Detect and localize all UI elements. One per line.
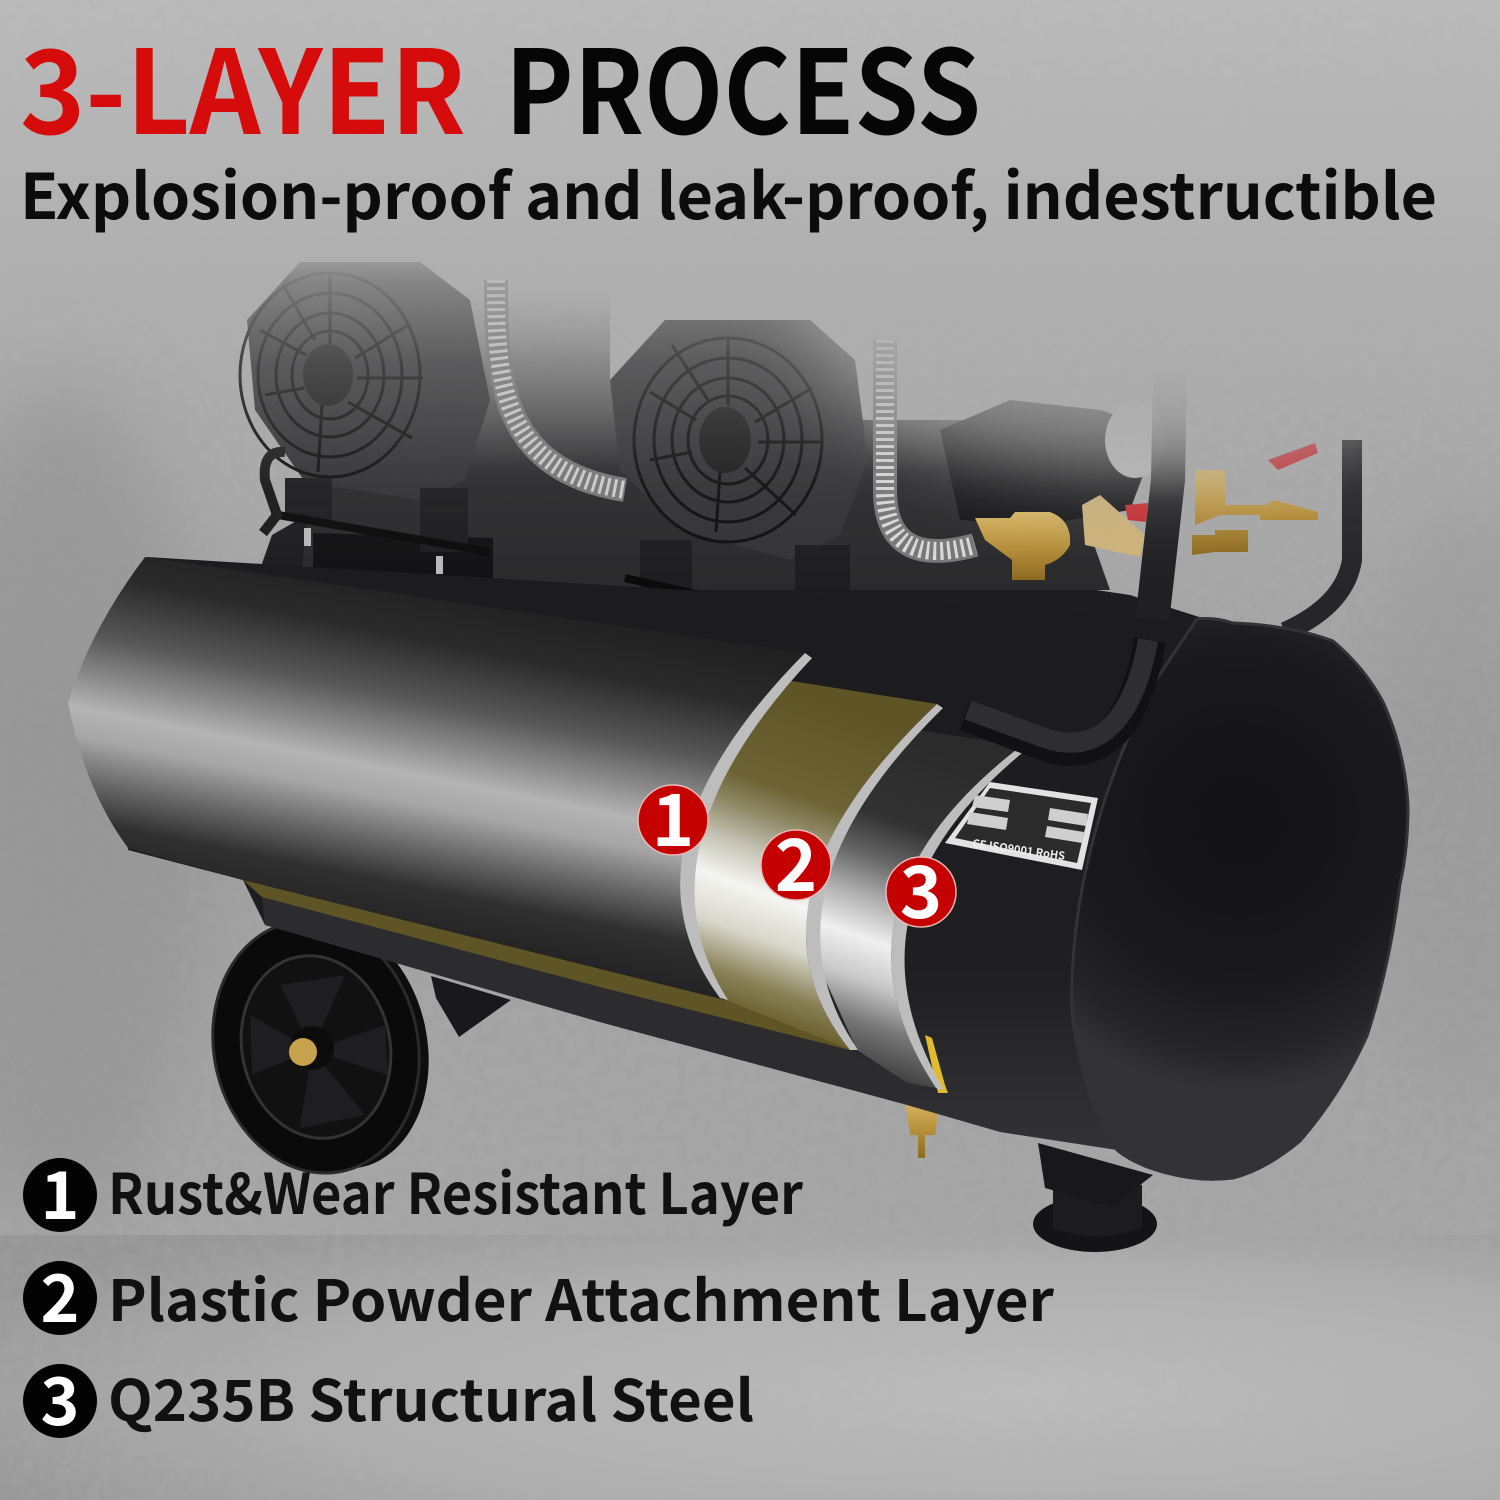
rear frame leg [431,976,511,1037]
curved handle tube along tank [965,640,1150,750]
callout badge 2 [761,807,831,912]
right handle tube [1285,440,1352,632]
nameplate: CE ISO9001 RoHS [971,835,1066,864]
callout badge 1 [638,762,708,867]
rear tank end [262,522,1200,621]
title: 3-LAYER [20,0,466,168]
yellow warning label [925,1035,948,1093]
braided hose 2 [885,340,975,551]
center brass fitting [1082,495,1145,557]
callout badge 1: 1 [652,762,694,867]
wheel hub bolt [289,1038,317,1066]
callout badge 3: 3 [900,834,942,939]
drain valve [905,1100,940,1158]
right brass fittings [1192,470,1318,555]
wheel [190,902,451,1192]
legend row 3: 3 [41,1349,79,1445]
nameplate [945,782,1098,870]
title: PROCESS [505,0,981,168]
fan 2 [610,320,868,560]
title [20,0,981,168]
bracket 2 [624,540,850,590]
steel edge stripes [680,653,1027,1090]
callout badge 2: 2 [775,807,817,912]
layer 3: structural steel panel [780,728,1021,1088]
layer 1: rust and wear panel [68,557,805,998]
legend row 1: Rust&Wear Resistant Layer [108,1150,804,1231]
callout badge 3 [886,834,956,939]
tank body [128,557,1210,1150]
bracket 1 [259,446,493,578]
tank end cap [1072,618,1408,1179]
layer 2: powder attachment panel [640,680,937,1050]
legend row 1: 1 [41,1143,79,1239]
subtitle: Explosion-proof and leak-proof, indestructible [20,147,1437,238]
red valve handles [1125,443,1318,522]
pressure gauge and valve body [940,400,1165,525]
motor bodies [300,290,1110,590]
olive underside strip [243,880,850,1050]
left brass fitting [975,512,1070,580]
upright handle tube [1150,370,1170,640]
legend row 3: Q235B Structural Steel [108,1356,754,1438]
fan 1 [240,262,490,500]
background: concrete floor [0,1235,1500,1500]
legend row 2: Plastic Powder Attachment Layer [108,1256,1054,1338]
bracket bolts [304,528,443,574]
dark band below olive strip [262,897,936,1103]
braided hose 1 [496,280,625,490]
legend row 2: 2 [41,1246,79,1342]
compressor: motors, fans and fittings fading into the wall [238,262,1362,632]
tank foot [1033,1143,1157,1252]
